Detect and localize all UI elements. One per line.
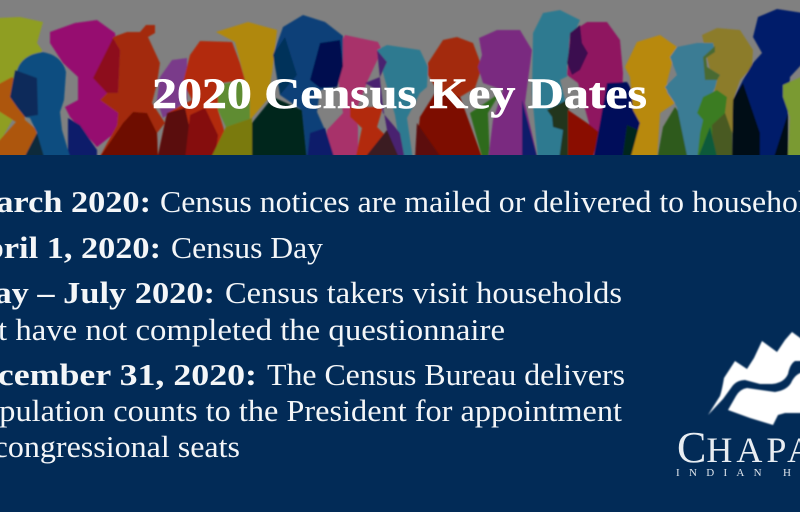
logo: Chapa-De Indian Health xyxy=(676,332,800,479)
text block: December 31: The Census Bureau delivers xyxy=(267,357,625,392)
text block: December 31 xyxy=(0,357,625,464)
text block: April 1: Census Day xyxy=(171,230,324,265)
text block: March 2020: Census notices are mailed or delivered to households xyxy=(160,184,800,219)
title: 2020 Census Key Dates xyxy=(152,71,647,118)
text block: May to July: Census takers visit households xyxy=(225,275,622,310)
text block: April 1 xyxy=(0,230,324,265)
text block: May to July xyxy=(0,275,622,347)
icon: mountains and river xyxy=(708,332,800,425)
panel: silhouette header banner xyxy=(0,0,800,160)
